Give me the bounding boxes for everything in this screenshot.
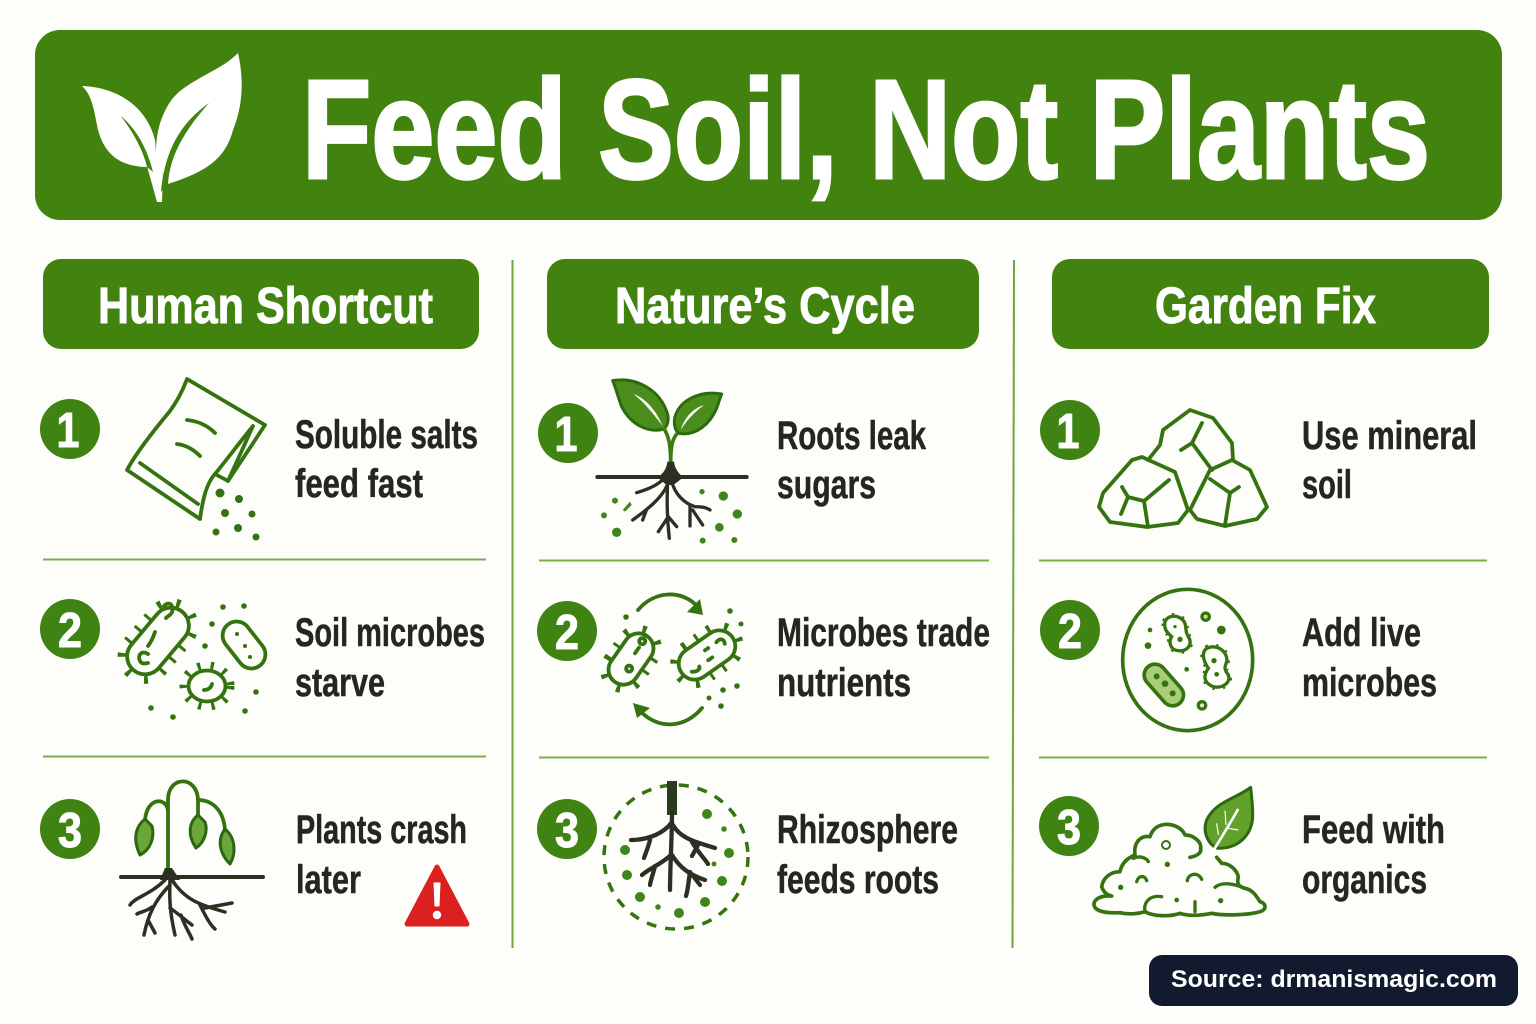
text: feed with organics <box>1302 808 1445 902</box>
source badge: Source: drmanismagic.com <box>1171 966 1497 993</box>
text: add live microbes: Add live <box>1302 611 1421 655</box>
badge 3: 3 <box>1057 801 1081 855</box>
icon: wilted plant <box>121 781 263 939</box>
text: microbes trade nutrients <box>777 611 990 705</box>
panel: nature's cycle <box>537 259 990 929</box>
step 1: soluble salts <box>40 379 478 540</box>
text: soil microbes starve: Soil microbes <box>295 611 485 655</box>
text: roots leak sugars: sugars <box>777 463 876 507</box>
text: soluble salts feed fast: feed fast <box>295 462 423 506</box>
text: rhizosphere feeds roots <box>777 808 958 902</box>
icon: microbes in circle <box>1123 589 1253 731</box>
badge 1: 1 <box>554 408 578 462</box>
step 2: live microbes <box>1040 589 1437 731</box>
text: soil microbes starve: starve <box>295 661 385 705</box>
text: feed with organics: Feed with <box>1302 808 1445 852</box>
badge 2: 2 <box>1058 605 1082 659</box>
heading: garden fix <box>1052 259 1489 349</box>
badge 1 <box>40 399 100 459</box>
badge 2 <box>1040 600 1100 660</box>
badge 2: 2 <box>58 604 82 658</box>
badge 2: 2 <box>555 606 579 660</box>
text: roots leak sugars: Roots leak <box>777 414 927 458</box>
text: add live microbes <box>1302 611 1437 705</box>
icon: microbes trading nutrients <box>603 594 744 724</box>
icon: warning triangle <box>407 867 467 924</box>
step 2: microbes trade <box>537 594 990 724</box>
heading: garden fix: Garden Fix <box>1155 277 1376 334</box>
badge 1 <box>538 403 598 463</box>
text: plants crash later <box>296 808 467 902</box>
icon: starving microbes <box>120 600 271 720</box>
text: rhizosphere feeds roots: Rhizosphere <box>777 808 958 852</box>
panel: garden fix <box>1039 259 1489 916</box>
badge 2 <box>40 599 100 659</box>
icon: seedling with roots <box>597 380 747 544</box>
badge 1: 1 <box>56 404 80 458</box>
badge 3: 3 <box>555 804 579 858</box>
heading: nature's cycle <box>547 259 979 349</box>
badge 2 <box>537 601 597 661</box>
badge 3 <box>537 799 597 859</box>
text: use mineral soil: soil <box>1302 463 1352 507</box>
arrow: bottom curved <box>633 703 702 724</box>
badge 3 <box>40 799 100 859</box>
step 2: soil microbes <box>40 599 485 720</box>
title banner <box>35 30 1502 220</box>
panel: human shortcut <box>40 259 486 939</box>
text: roots leak sugars <box>777 414 927 507</box>
text: microbes trade nutrients: Microbes trade <box>777 611 990 655</box>
heading: human shortcut <box>43 259 479 349</box>
text: microbes trade nutrients: nutrients <box>777 661 911 705</box>
text: soluble salts feed fast: Soluble salts <box>295 413 478 457</box>
source badge <box>1149 955 1518 1006</box>
badge 3 <box>1039 796 1099 856</box>
text: plants crash later: later <box>296 858 361 902</box>
text: add live microbes: microbes <box>1302 661 1437 705</box>
heading: nature's cycle: Nature’s Cycle <box>615 277 915 334</box>
step 3: organics <box>1039 787 1445 916</box>
step 1: mineral soil <box>1040 400 1477 527</box>
arrow: top curved <box>638 594 703 615</box>
text: feed with organics: organics <box>1302 858 1427 902</box>
step 3: rhizosphere <box>537 781 958 929</box>
icon: rhizosphere roots <box>604 781 748 929</box>
text: soil microbes starve <box>295 611 485 705</box>
icon: compost pile with leaf <box>1094 787 1265 916</box>
icon: white leaf logo <box>82 53 242 202</box>
text: rhizosphere feeds roots: feeds roots <box>777 858 939 902</box>
badge 1 <box>1040 400 1100 460</box>
heading: human shortcut: Human Shortcut <box>98 277 433 334</box>
text: use mineral soil: Use mineral <box>1302 414 1477 458</box>
step 3: plants crash <box>40 781 467 939</box>
badge 3: 3 <box>58 804 82 858</box>
icon: rocks <box>1099 410 1267 527</box>
step 1: roots leak <box>538 380 927 544</box>
text: soluble salts feed fast <box>295 413 478 506</box>
icon: fertilizer bag <box>127 379 265 540</box>
badge 1: 1 <box>1056 405 1080 459</box>
text: use mineral soil <box>1302 414 1477 507</box>
text: plants crash later: Plants crash <box>296 808 467 852</box>
